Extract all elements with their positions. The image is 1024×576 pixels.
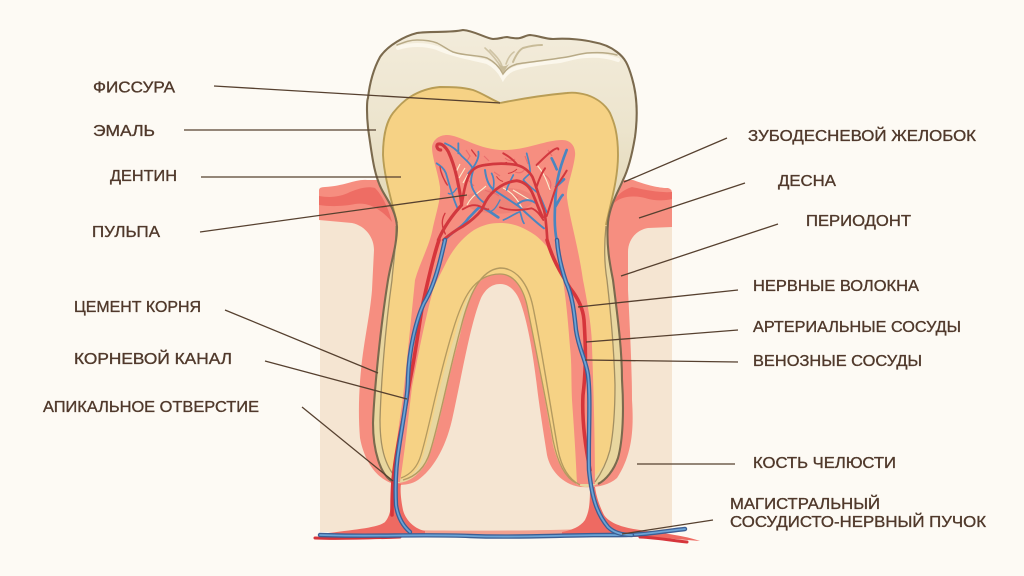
label: main neurovascular bundle bbox=[730, 494, 987, 531]
root contour lines bbox=[380, 226, 615, 485]
flares to the bundle bbox=[320, 482, 700, 541]
tooth outline bbox=[367, 30, 637, 484]
dentin bbox=[380, 87, 618, 483]
label: gingival sulcus: ЗУБОДЕСНЕВОЙ ЖЕЛОБОК bbox=[748, 126, 977, 145]
label: nerve fibres: НЕРВНЫЕ ВОЛОКНА bbox=[753, 278, 919, 295]
label: root cementum: ЦЕМЕНТ КОРНЯ bbox=[74, 299, 201, 316]
label: venous vessels: ВЕНОЗНЫЕ СОСУДЫ bbox=[753, 353, 922, 370]
main neurovascular bundle bbox=[315, 529, 687, 542]
label: apical foramen: АПИКАЛЬНОЕ ОТВЕРСТИЕ bbox=[43, 399, 259, 416]
label: main neurovascular bundle: СОСУДИСТО-НЕРВНЫЙ ПУЧОК bbox=[730, 512, 987, 531]
fissure and occlusal surface bbox=[397, 40, 618, 78]
label: enamel: ЭМАЛЬ bbox=[93, 123, 155, 140]
leader lines bbox=[184, 86, 778, 534]
soft tissue: gum and periodontium bbox=[319, 180, 672, 487]
dentin outline bbox=[383, 87, 618, 225]
tooth crown enamel bbox=[367, 30, 637, 227]
arterial branches bbox=[437, 144, 567, 240]
main vessels in canals bbox=[392, 240, 632, 535]
gum dark band left bbox=[319, 187, 392, 222]
venous branches bbox=[437, 143, 567, 240]
label: gum: ДЕСНА bbox=[778, 173, 836, 190]
tooth root bbox=[373, 222, 623, 487]
gum dark band right bbox=[612, 187, 672, 205]
label: jaw bone: КОСТЬ ЧЕЛЮСТИ bbox=[753, 455, 896, 472]
label: arterial vessels: АРТЕРИАЛЬНЫЕ СОСУДЫ bbox=[753, 319, 961, 336]
soft band along the bundle bbox=[400, 529, 590, 535]
nerve fibres bbox=[456, 164, 550, 208]
jaw bone bbox=[320, 215, 672, 532]
label: dentin: ДЕНТИН bbox=[110, 168, 177, 185]
pulp tissue texture bbox=[440, 150, 552, 214]
label: root canal: КОРНЕВОЙ КАНАЛ bbox=[74, 349, 232, 368]
label: main neurovascular bundle: МАГИСТРАЛЬНЫЙ bbox=[730, 494, 880, 513]
label: fissure: ФИССУРА bbox=[93, 80, 175, 96]
label: pulp: ПУЛЬПА bbox=[92, 224, 160, 241]
pulp chamber and canals bbox=[393, 135, 595, 484]
label: periodontium: ПЕРИОДОНТ bbox=[806, 213, 911, 230]
